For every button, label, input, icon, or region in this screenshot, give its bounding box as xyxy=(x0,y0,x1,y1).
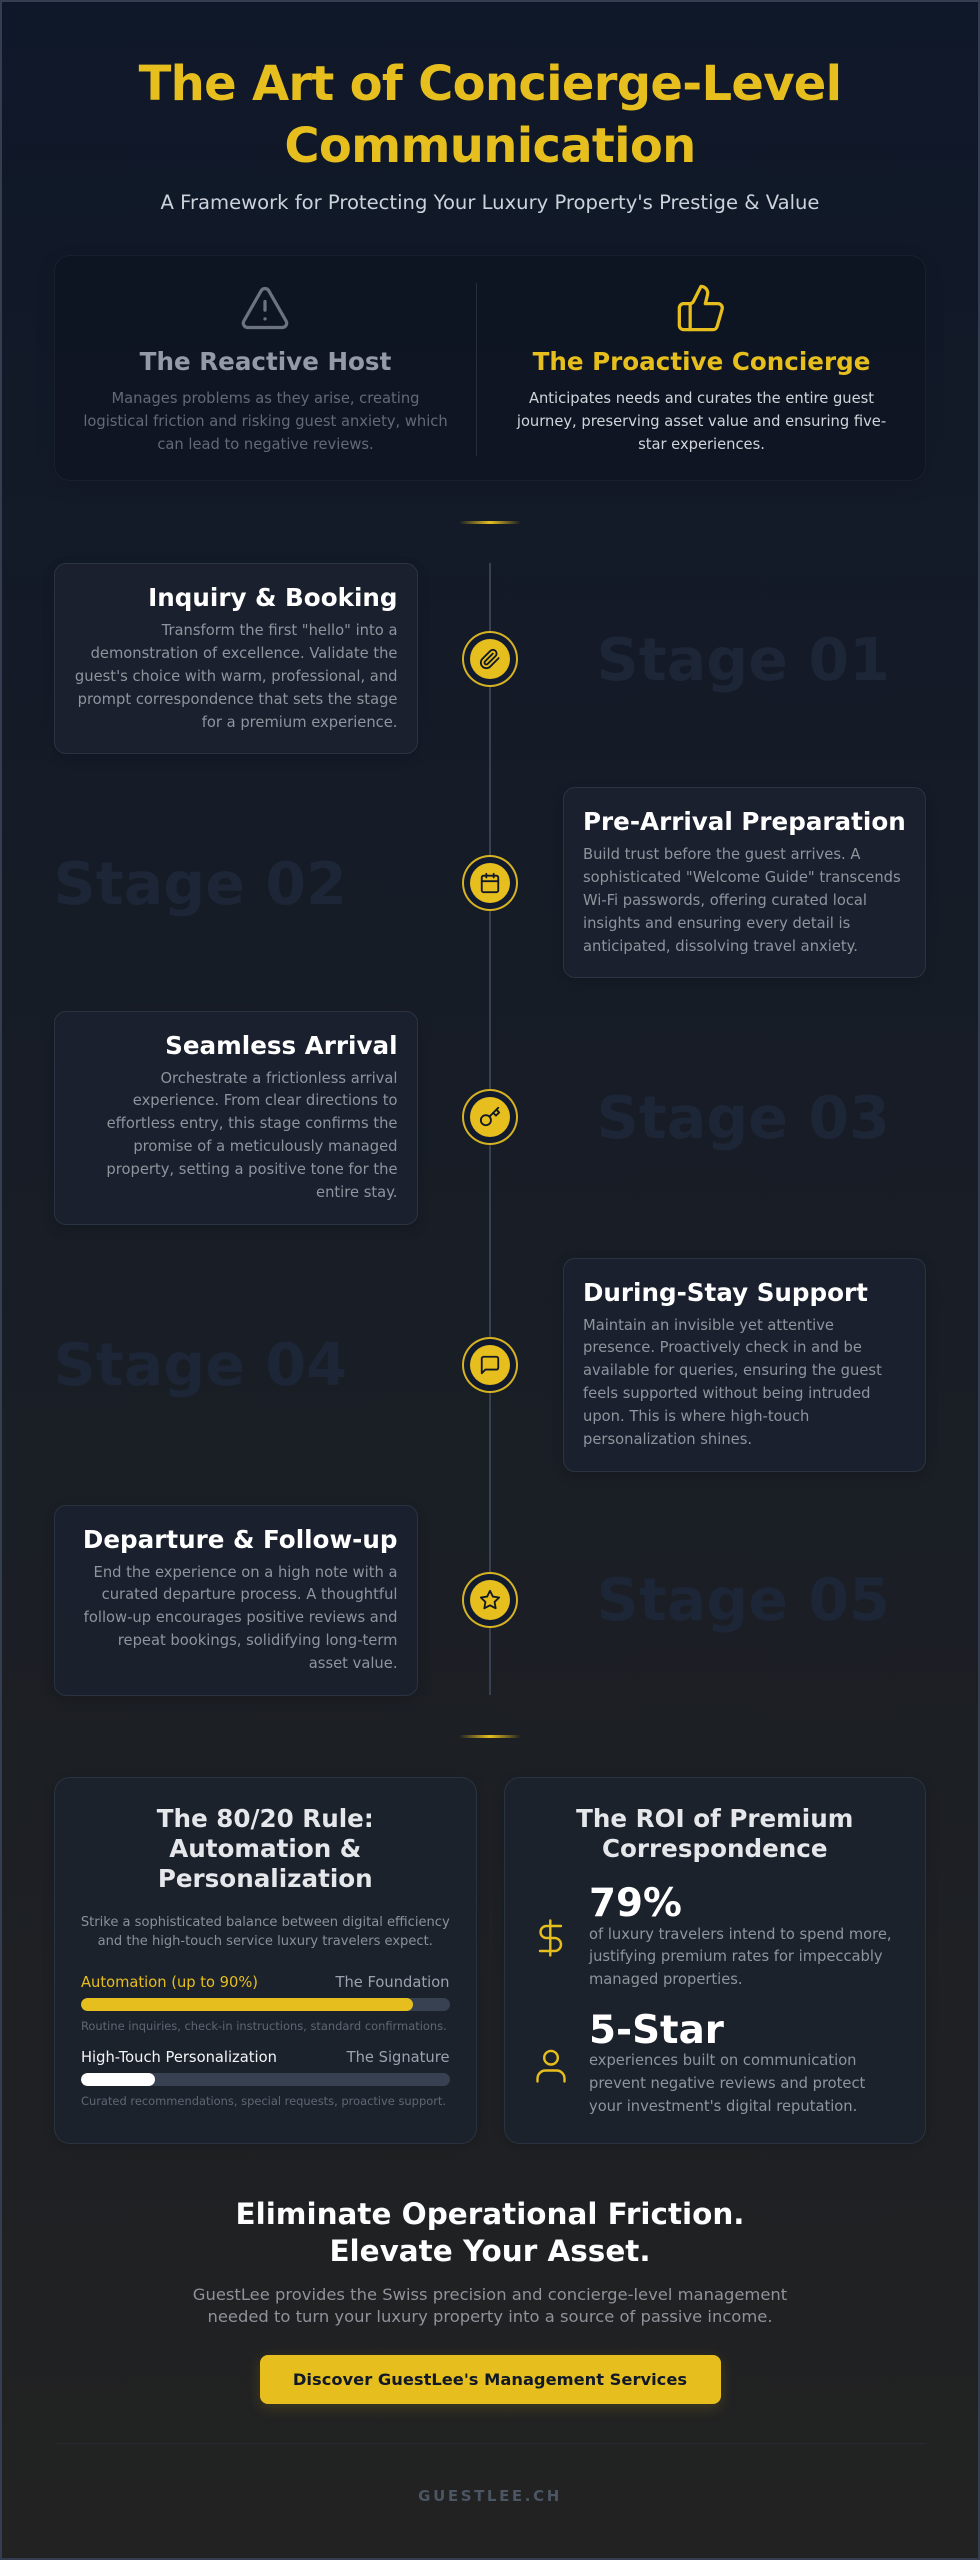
heading: During-Stay Support xyxy=(583,1278,868,1306)
heading: ROI: The ROI of Premium xyxy=(576,1804,853,1833)
text: proactive concierge description: Anticipates needs and curates the entire guest xyxy=(529,390,874,406)
footer: guestlee.ch: GUESTLEE.CH xyxy=(418,2487,562,2505)
heading: Inquiry & Booking xyxy=(148,583,398,612)
heading: call to action xyxy=(236,2197,744,2268)
text: for a premium experience. xyxy=(202,714,398,731)
text: proactive concierge description: journey, preserving asset value and ensuring five- xyxy=(517,412,886,430)
panel: the ROI of premium correspondence xyxy=(504,1777,926,2144)
card: during-stay support xyxy=(563,1258,926,1472)
text: intro xyxy=(81,1914,450,1949)
heading: 80/20 rule xyxy=(156,1804,374,1893)
button: discover services: Discover GuestLee's Management Services xyxy=(293,2370,687,2389)
text: proactive concierge description: star experiences. xyxy=(638,436,765,452)
text: Maintain an invisible yet attentive xyxy=(583,1316,834,1334)
text: experience. From clear directions to xyxy=(133,1092,398,1109)
heading: ROI xyxy=(576,1804,853,1863)
divider: gold rule xyxy=(459,1735,521,1738)
card: inquiry and booking xyxy=(54,563,418,754)
text: anticipated, dissolving travel anxiety. xyxy=(583,938,858,955)
heading: call to action: Eliminate Operational Friction. xyxy=(236,2197,744,2231)
text: 79% explanation: managed properties. xyxy=(589,1971,743,1988)
heading: ROI: Correspondence xyxy=(602,1834,828,1863)
button: discover services xyxy=(260,2355,720,2404)
watermark: stage 02: Stage 02 xyxy=(54,850,347,918)
title: The Art of Concierge-Level xyxy=(139,56,841,112)
text: available for queries, ensuring the guest xyxy=(583,1362,882,1379)
text xyxy=(84,1564,398,1672)
title xyxy=(138,56,841,174)
icon: person xyxy=(536,2050,566,2083)
heading: Pre-Arrival Preparation xyxy=(583,807,906,836)
text xyxy=(106,1070,398,1201)
text: proactive concierge description xyxy=(516,390,886,452)
node: calendar icon xyxy=(470,863,510,903)
text: call to action description: GuestLee provides the Swiss precision and concierge-level management xyxy=(193,2284,787,2304)
text xyxy=(583,1316,882,1448)
card: departure and follow-up xyxy=(54,1504,418,1696)
node: message icon xyxy=(470,1344,510,1384)
icon: warning triangle xyxy=(242,286,288,330)
icon: dollar sign xyxy=(538,1919,562,1957)
stat: 5-star: 5-Star xyxy=(589,2008,724,2052)
label: automation: Automation (up to 90%) xyxy=(81,1974,258,1990)
text: insights and ensuring every detail is xyxy=(583,915,850,932)
text: asset value. xyxy=(309,1655,398,1672)
text: personalization shines. xyxy=(583,1431,752,1448)
text: effortless entry, this stage confirms the xyxy=(107,1115,398,1132)
text: 79% explanation: of luxury travelers intend to spend more, xyxy=(589,1926,892,1942)
title: Communication xyxy=(284,118,696,174)
node: paperclip icon xyxy=(470,639,510,679)
label: high-touch personalization: High-Touch Personalization xyxy=(81,2049,277,2066)
text: call to action description: needed to turn your luxury property into a source of passive income. xyxy=(207,2307,773,2326)
text: reactive host description: can lead to negative reviews. xyxy=(157,436,374,452)
icon: thumbs up xyxy=(678,284,724,332)
text: 79% explanation: justifying premium rates for impeccably xyxy=(589,1948,883,1965)
text: follow-up encourages positive reviews and xyxy=(84,1609,398,1626)
heading: the reactive host: The Reactive Host xyxy=(140,346,391,376)
heading: 80/20 rule: The 80/20 Rule: xyxy=(157,1804,374,1833)
heading: 80/20 rule: Automation & xyxy=(169,1834,361,1863)
bar: automation 90 percent xyxy=(81,1998,450,2011)
text: Orchestrate a frictionless arrival xyxy=(160,1070,398,1086)
text: 79% explanation xyxy=(588,1926,892,1988)
text: 5-star explanation: prevent negative reviews and protect xyxy=(589,2075,865,2092)
subtitle: A Framework for Protecting Your Luxury Property's Prestige & Value xyxy=(161,191,819,214)
text: reactive host description: Manages problems as they arise, creating xyxy=(112,390,420,406)
watermark: stage 04: Stage 04 xyxy=(54,1330,347,1398)
text: intro: and the high-touch service luxury travelers expect. xyxy=(98,1934,433,1949)
text: upon. This is where high-touch xyxy=(583,1408,809,1425)
text: reactive host description: logistical friction and risking guest anxiety, which xyxy=(83,412,448,430)
node: key icon xyxy=(470,1097,510,1137)
heading: the proactive concierge: The Proactive Concierge xyxy=(533,346,870,376)
heading: 80/20 rule: Personalization xyxy=(158,1864,373,1893)
text: property, setting a positive tone for the xyxy=(106,1161,398,1178)
card: pre-arrival preparation xyxy=(563,787,926,978)
watermark: stage 01: Stage 01 xyxy=(596,626,890,694)
text: entire stay. xyxy=(316,1184,398,1201)
note: personalization examples: Curated recommendations, special requests, proactive support. xyxy=(81,2094,446,2108)
heading: Departure & Follow-up xyxy=(83,1524,398,1554)
card: seamless arrival xyxy=(54,1010,418,1224)
text: presence. Proactively check in and be xyxy=(583,1339,862,1356)
footer separator xyxy=(55,2443,926,2444)
text: prompt correspondence that sets the stage xyxy=(78,691,398,708)
text: End the experience on a high note with a xyxy=(94,1564,398,1580)
label: the signature: The Signature xyxy=(347,2049,450,2066)
text: Wi-Fi passwords, offering curated local xyxy=(583,892,867,909)
bar: personalization 20 percent xyxy=(81,2073,450,2086)
timeline spine xyxy=(489,563,491,1695)
text: demonstration of excellence. Validate the xyxy=(91,645,398,662)
text: guest's choice with warm, professional, and xyxy=(75,668,398,685)
text xyxy=(583,846,901,955)
text: sophisticated "Welcome Guide" transcends xyxy=(583,869,901,886)
watermark: stage 05: Stage 05 xyxy=(596,1566,890,1634)
heading: call to action: Elevate Your Asset. xyxy=(329,2234,651,2268)
text: 5-star explanation: your investment's digital reputation. xyxy=(589,2098,857,2115)
text: curated departure process. A thoughtful xyxy=(102,1586,398,1603)
text: call to action description xyxy=(193,2284,787,2326)
panel: the 80/20 rule xyxy=(54,1777,476,2144)
text xyxy=(75,622,398,731)
text: promise of a meticulously managed xyxy=(133,1138,398,1155)
text: Build trust before the guest arrives. A xyxy=(583,846,860,863)
text: repeat bookings, solidifying long-term xyxy=(118,1632,398,1649)
divider: gold rule xyxy=(459,521,521,524)
text: reactive host description xyxy=(83,390,448,452)
label: the foundation: The Foundation xyxy=(336,1974,450,1990)
text: feels supported without being intruded xyxy=(583,1385,870,1402)
stat: 79%: 79% xyxy=(589,1880,682,1926)
text: 5-star explanation: experiences built on communication xyxy=(589,2052,856,2069)
heading: Seamless Arrival xyxy=(165,1030,398,1060)
watermark: stage 03: Stage 03 xyxy=(596,1084,890,1152)
text: intro: Strike a sophisticated balance between digital efficiency xyxy=(81,1914,450,1930)
note: automation examples: Routine inquiries, check-in instructions, standard confirmations. xyxy=(81,2019,447,2033)
text: Transform the first "hello" into a xyxy=(162,622,398,639)
text: 5-star explanation xyxy=(589,2052,865,2115)
node: star icon xyxy=(470,1580,510,1620)
panel: reactive vs proactive comparison xyxy=(54,255,926,481)
